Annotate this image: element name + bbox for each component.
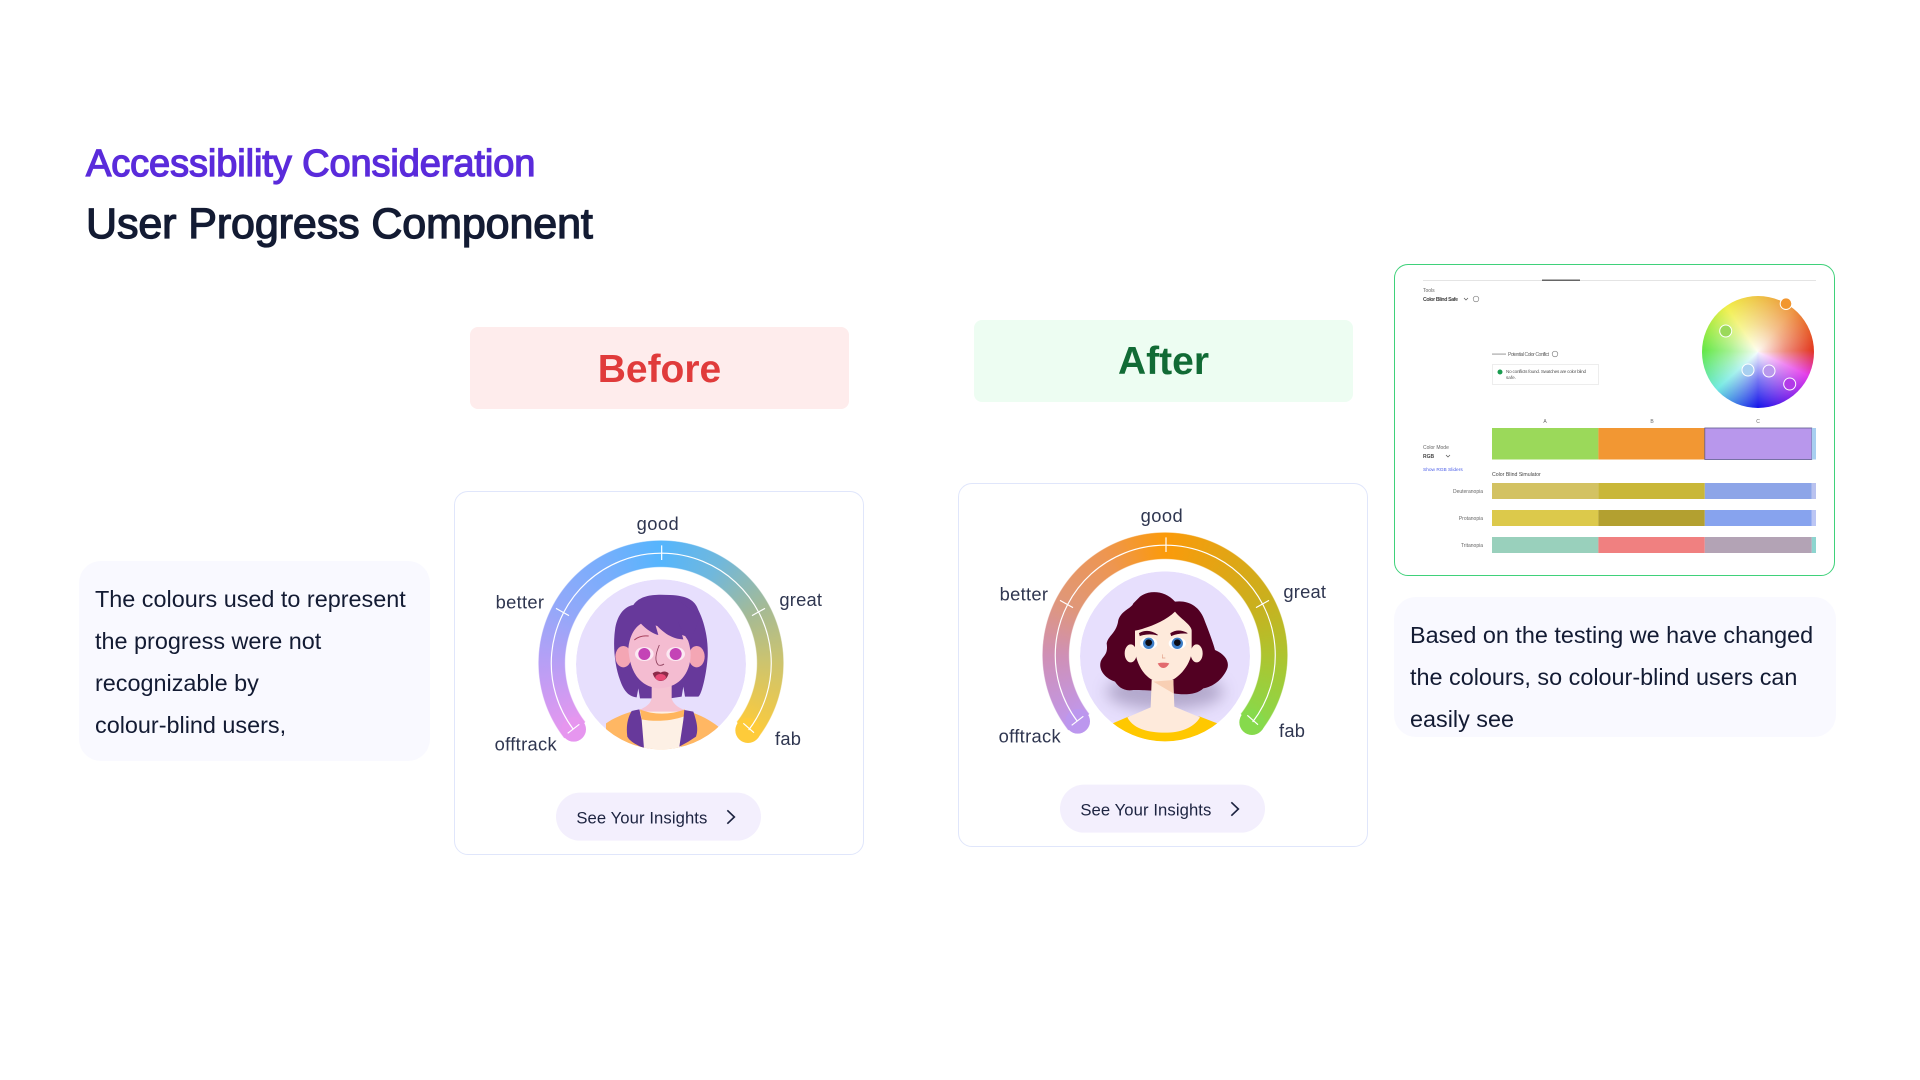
wheel markers xyxy=(1719,298,1795,390)
chart: after gauge markers and labels: offtrack xyxy=(998,725,1061,746)
label: Before: Before xyxy=(598,348,721,391)
chart: swatches and simulator xyxy=(1422,280,1816,553)
chart: swatches and simulator: Tritanopia xyxy=(1460,543,1483,549)
chart: swatches and simulator: A xyxy=(1543,419,1547,425)
main swatches xyxy=(1492,428,1816,460)
chart: after gauge markers and labels: good xyxy=(1140,504,1182,526)
text block: after explanation xyxy=(1394,597,1836,737)
text block: after explanation: Based on the testing we have changed xyxy=(1410,622,1813,648)
chart: swatches and simulator: Tools xyxy=(1422,288,1435,294)
text block: after explanation: easily see xyxy=(1410,706,1514,732)
title: Accessibility Consideration: Accessibility Consideration xyxy=(86,143,535,185)
text block: after explanation: the colours, so colour-blind users can xyxy=(1410,664,1797,690)
chart: swatches and simulator: Show RGB Sliders xyxy=(1422,467,1463,473)
text block: before explanation: the progress were not xyxy=(95,628,321,654)
panel: before progress component xyxy=(454,491,864,855)
chart: swatches and simulator: Potential Color Conflict xyxy=(1508,352,1549,358)
button: see your insights xyxy=(1060,784,1264,832)
chart: after gauge markers and labels: fab xyxy=(1278,720,1304,740)
chart: after gradient gauge ring xyxy=(1042,532,1288,730)
tritanopia swatches xyxy=(1492,537,1816,553)
protanopia swatches xyxy=(1492,510,1816,526)
chart: before gauge markers and labels: offtrack xyxy=(494,733,557,754)
label: Before xyxy=(470,327,849,409)
icon: dark-curly-haired avatar xyxy=(1080,572,1250,742)
icon: purple-haired avatar xyxy=(576,580,746,750)
text block: before explanation xyxy=(79,561,430,761)
button: see your insights: See Your Insights xyxy=(576,808,707,827)
chart: before gauge markers and labels xyxy=(494,512,822,840)
chart: swatches and simulator: Color Mode xyxy=(1422,445,1449,451)
deuteranopia swatches xyxy=(1492,483,1816,499)
button: see your insights: See Your Insights xyxy=(1080,800,1211,819)
text block: before explanation: recognizable by xyxy=(95,670,259,696)
chart: before gradient gauge ring xyxy=(538,540,784,738)
chart: swatches and simulator: C xyxy=(1756,419,1760,425)
chart: after gauge markers and labels: great xyxy=(1283,580,1326,602)
chart: swatches and simulator: No conflicts found. Swatches are color blind xyxy=(1506,369,1586,374)
label: After xyxy=(974,320,1353,402)
chart: before gauge markers and labels: good xyxy=(636,512,678,534)
panel: colour blind safe tool screenshot xyxy=(1394,264,1835,576)
chart: colour wheel xyxy=(1702,296,1814,408)
chart: before gauge markers and labels: fab xyxy=(774,728,800,748)
label: After: After xyxy=(1118,340,1209,383)
button: see your insights xyxy=(556,792,760,840)
chart: swatches and simulator: Protanopia xyxy=(1458,516,1483,522)
chart: swatches and simulator: safe. xyxy=(1506,375,1515,380)
chart: after gauge markers and labels xyxy=(998,504,1326,832)
text block: before explanation: The colours used to represent xyxy=(95,586,406,612)
chart: before gauge markers and labels: better xyxy=(495,591,544,612)
text block: before explanation: colour-blind users, xyxy=(95,712,286,738)
chart: after gauge markers and labels: better xyxy=(999,583,1048,604)
chart: swatches and simulator: Deuteranopia xyxy=(1452,489,1483,495)
panel: after progress component xyxy=(958,483,1368,847)
chart: swatches and simulator: B xyxy=(1650,419,1654,425)
chart: before gauge markers and labels: great xyxy=(779,588,822,610)
chart: swatches and simulator: Color Blind Safe xyxy=(1422,297,1458,303)
chart: swatches and simulator: Color Blind Simulator xyxy=(1492,472,1540,478)
heading: User Progress Component: User Progress Component xyxy=(86,200,593,248)
chart: swatches and simulator: RGB xyxy=(1422,454,1434,460)
